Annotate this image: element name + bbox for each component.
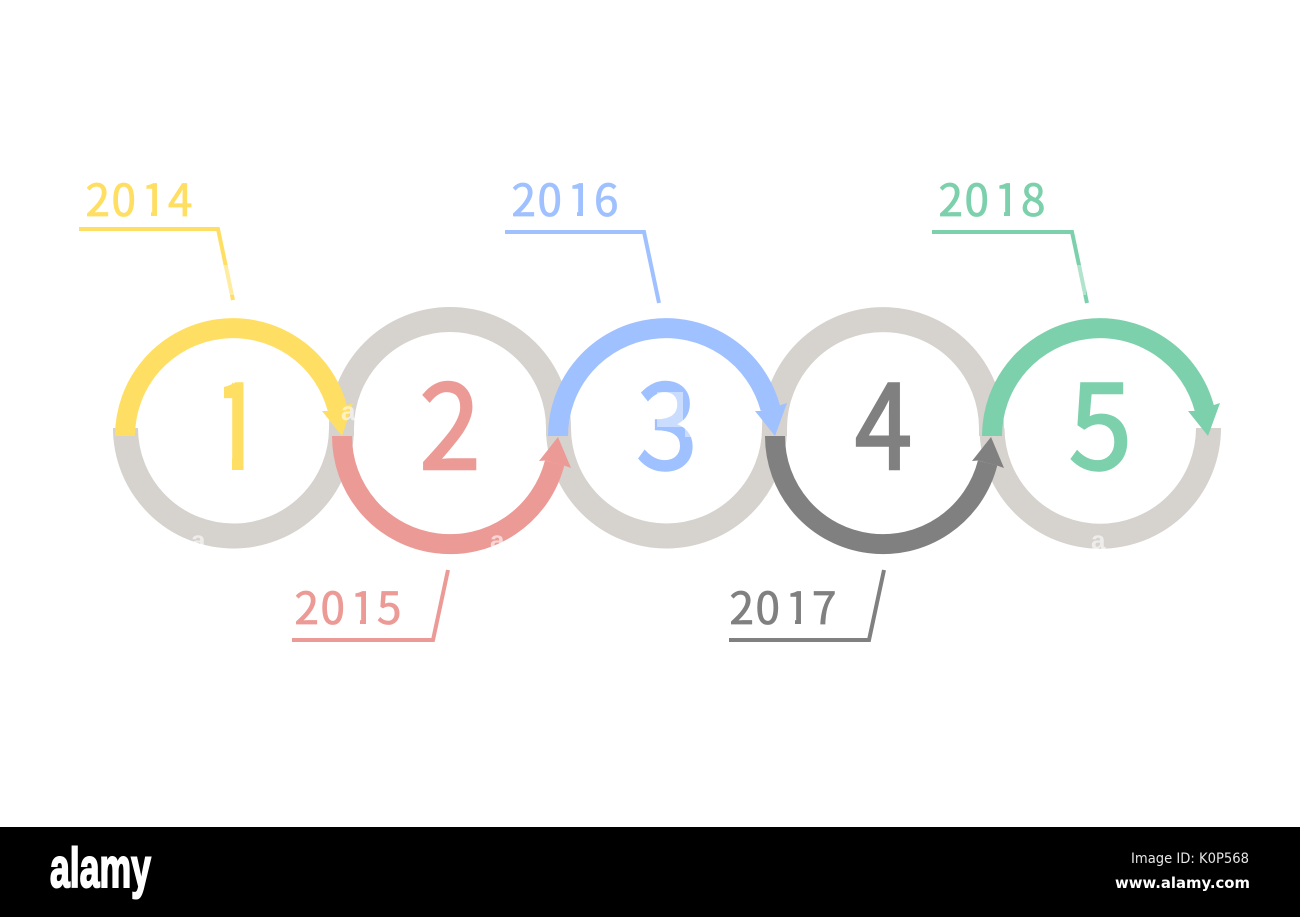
- alamy logo: alamy: [50, 836, 151, 899]
- step 2: red arrow, number and year: 2: [419, 331, 481, 504]
- step 1: yellow arrow, number and year: 2014: [86, 165, 192, 229]
- watermark marks: [191, 265, 1106, 555]
- step 4: dark gray arrow, number and year: 4: [855, 331, 912, 504]
- website: www.alamy.com: [1115, 874, 1250, 892]
- watermark marks: a: [490, 525, 505, 555]
- step 5: green arrow, number and year: 2018: [938, 165, 1045, 229]
- step 2: red arrow, number and year: 2015: [294, 573, 401, 637]
- step 5: green arrow, number and year: 5: [1069, 330, 1132, 504]
- image id: Image ID: K0P568: [1131, 851, 1249, 867]
- step 3: blue arrow, number and year: [505, 182, 787, 472]
- step 4: dark gray arrow, number and year: [729, 382, 1004, 642]
- step 1: yellow arrow, number and year: [79, 182, 353, 470]
- step 1: yellow arrow, number and year: 1: [203, 330, 270, 504]
- watermark marks: a: [1091, 525, 1106, 555]
- gray ring segments: [126, 320, 1208, 536]
- step 3: blue arrow, number and year: 2016: [512, 165, 618, 229]
- watermark marks: a: [191, 525, 206, 555]
- step 2: red arrow, number and year: [292, 380, 571, 642]
- footer bar: [0, 827, 1300, 917]
- watermark marks: a: [341, 396, 356, 426]
- step 4: dark gray arrow, number and year: 2017: [730, 573, 836, 637]
- step 5: green arrow, number and year: [932, 182, 1220, 472]
- step 3: blue arrow, number and year: 3: [636, 331, 698, 504]
